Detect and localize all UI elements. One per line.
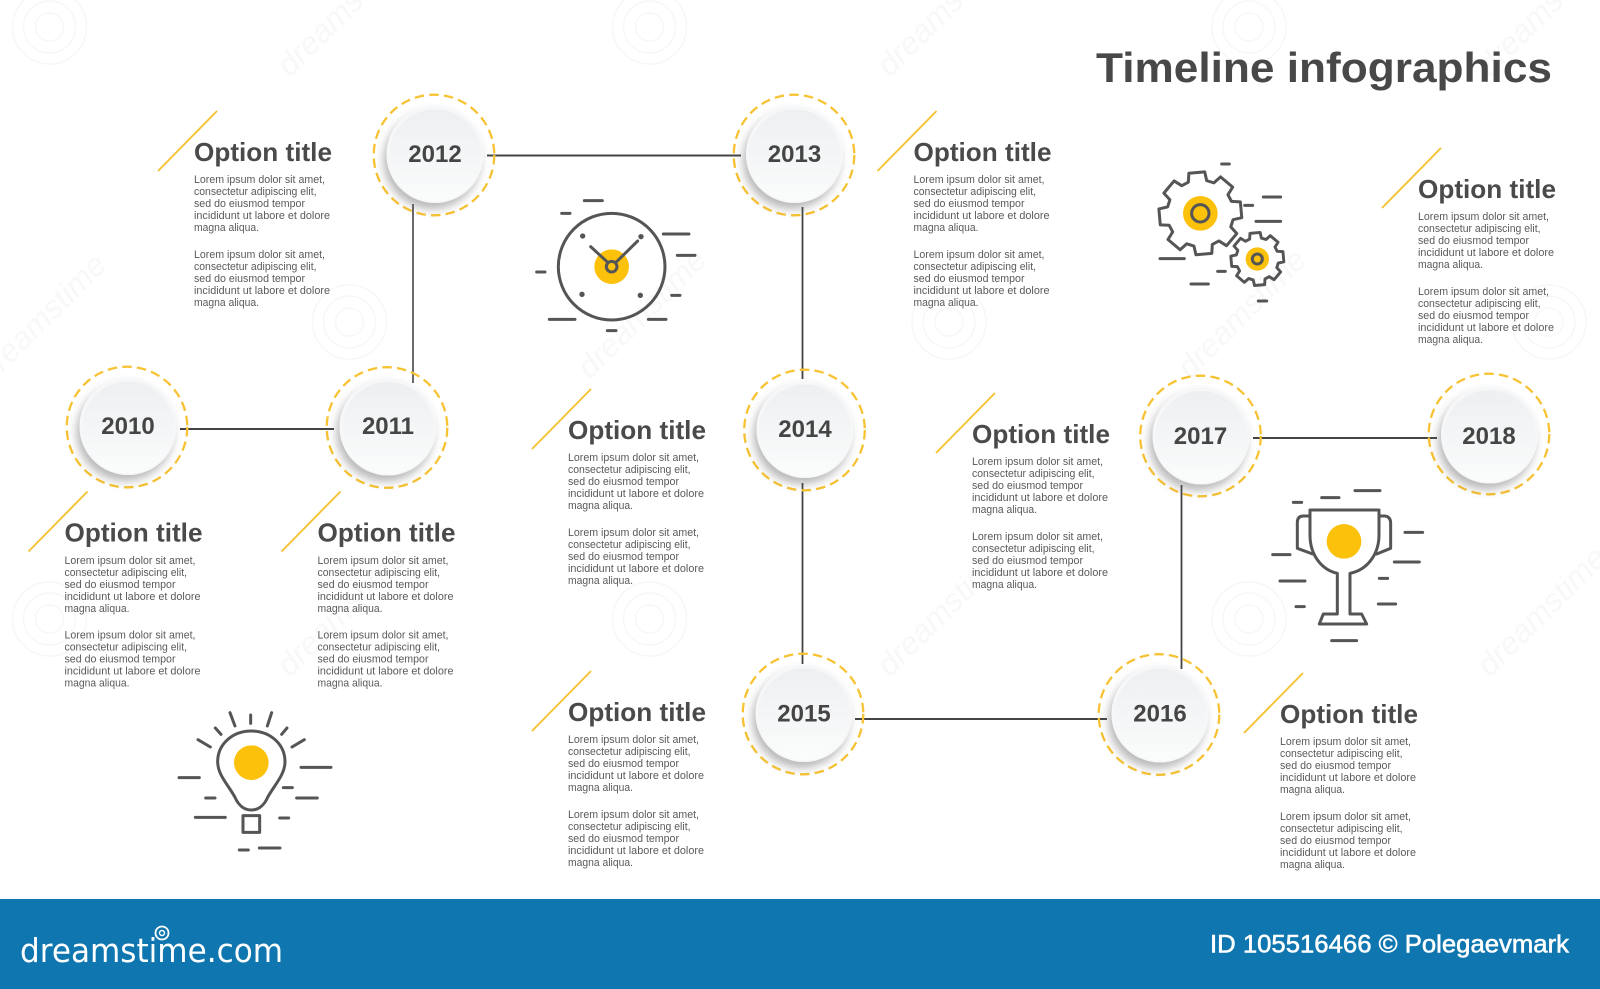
node: 2018: 2018 (1462, 423, 1516, 450)
node: 2014 (744, 370, 865, 490)
text block: 2014: Lorem ipsum dolor sit amet, (568, 527, 699, 539)
text block: 2011: consectetur adipiscing elit, (318, 567, 440, 579)
text block: 2011: Lorem ipsum dolor sit amet, (318, 630, 448, 642)
node: 2012 (374, 95, 494, 215)
text block: 2011: consectetur adipiscing elit, (318, 642, 440, 654)
text block: 2010: sed do eiusmod tempor (64, 579, 176, 591)
icon: light bulb (179, 713, 331, 850)
text block: 2018: Option title (1418, 174, 1556, 204)
text block: 2013: magna aliqua. (914, 222, 978, 234)
text block: 2012: magna aliqua. (194, 222, 259, 234)
node: 2017: 2017 (1174, 423, 1227, 450)
text block: 2017: Lorem ipsum dolor sit amet, (972, 456, 1103, 468)
text block: 2015: Option title (568, 697, 706, 727)
text block: 2014: consectetur adipiscing elit, (568, 539, 690, 551)
watermark pattern: dreamstime (269, 539, 413, 683)
node: 2012: 2012 (408, 141, 462, 168)
text block: 2017: Lorem ipsum dolor sit amet, (972, 531, 1103, 543)
watermark pattern: dreamstime (569, 241, 713, 385)
text block: 2017: magna aliqua. (972, 504, 1037, 516)
text block: 2014: Lorem ipsum dolor sit amet, (568, 452, 699, 464)
text block: 2017: Option title (972, 419, 1110, 449)
node: 2014: 2014 (778, 416, 832, 443)
text block: 2015: incididunt ut labore et dolore (568, 845, 704, 857)
text block: 2014 (532, 389, 706, 587)
icon: gears (1159, 164, 1284, 301)
text block: 2014: incididunt ut labore et dolore (568, 488, 704, 500)
node: 2015: 2015 (777, 700, 831, 728)
node: 2013 (734, 95, 854, 215)
text block: 2010: consectetur adipiscing elit, (64, 567, 187, 579)
text block: 2016: consectetur adipiscing elit, (1280, 823, 1402, 835)
text block: 2017: consectetur adipiscing elit, (972, 543, 1094, 555)
text block: 2013: Lorem ipsum dolor sit amet, (914, 249, 1044, 261)
text block: 2011: incididunt ut labore et dolore (318, 666, 454, 678)
text block: 2015: Lorem ipsum dolor sit amet, (568, 809, 699, 821)
text block: 2018: magna aliqua. (1418, 334, 1483, 346)
text block: 2010: Option title (64, 518, 202, 548)
text block: 2018: incididunt ut labore et dolore (1418, 322, 1554, 334)
image id and credit: ID 105516466 © Polegaevmark (1210, 930, 1570, 958)
text block: 2013 (878, 111, 1052, 309)
text block: 2018 (1382, 148, 1556, 346)
text block: 2013: magna aliqua. (914, 297, 978, 309)
text block: 2012: Lorem ipsum dolor sit amet, (194, 174, 325, 186)
text block: 2014: magna aliqua. (568, 500, 633, 512)
text block: 2011: magna aliqua. (318, 603, 382, 615)
text block: 2014: Option title (568, 415, 706, 445)
text block: 2014: sed do eiusmod tempor (568, 551, 679, 563)
text block: 2010: magna aliqua. (64, 678, 130, 690)
text block: 2015: incididunt ut labore et dolore (568, 770, 704, 782)
text block: 2014: consectetur adipiscing elit, (568, 464, 690, 476)
text block: 2015: magna aliqua. (568, 857, 633, 869)
text block: 2015 (532, 671, 706, 869)
text block: 2012: consectetur adipiscing elit, (194, 186, 316, 198)
timeline connectors (180, 156, 1437, 719)
text block: 2010: Lorem ipsum dolor sit amet, (64, 630, 196, 642)
text block: 2011: magna aliqua. (318, 678, 382, 690)
text block: 2012: sed do eiusmod tempor (194, 198, 305, 210)
text block: 2013: incididunt ut labore et dolore (914, 210, 1050, 222)
text block: 2010 (28, 492, 202, 690)
text block: 2012: incididunt ut labore et dolore (194, 285, 330, 297)
text block: 2017: magna aliqua. (972, 579, 1037, 591)
text block: 2015: consectetur adipiscing elit, (568, 746, 690, 758)
text block: 2018: Lorem ipsum dolor sit amet, (1418, 286, 1549, 298)
text block: 2011: incididunt ut labore et dolore (318, 591, 454, 603)
text block: 2016 (1244, 673, 1418, 871)
node: 2015 (743, 654, 863, 774)
node: 2011 (327, 367, 447, 488)
node: 2010 (67, 367, 187, 487)
node: 2011: 2011 (362, 413, 414, 440)
title: Timeline infographics (1096, 44, 1552, 91)
text block: 2010: sed do eiusmod tempor (64, 654, 176, 666)
node: 2010: 2010 (101, 413, 155, 440)
text block: 2017: incididunt ut labore et dolore (972, 492, 1108, 504)
text block: 2018: Lorem ipsum dolor sit amet, (1418, 211, 1549, 223)
text block: 2014: magna aliqua. (568, 575, 633, 587)
watermark pattern: dreamstime (1169, 241, 1313, 385)
text block: 2016: magna aliqua. (1280, 784, 1345, 796)
text block: 2014: incididunt ut labore et dolore (568, 563, 704, 575)
text block: 2017: sed do eiusmod tempor (972, 555, 1083, 567)
node: 2016 (1099, 654, 1219, 775)
text block: 2013: incididunt ut labore et dolore (914, 285, 1050, 297)
text block: 2014: sed do eiusmod tempor (568, 476, 679, 488)
text block: 2013: Lorem ipsum dolor sit amet, (914, 174, 1044, 186)
text block: 2016: sed do eiusmod tempor (1280, 760, 1391, 772)
text block: 2010: incididunt ut labore et dolore (64, 666, 200, 678)
text block: 2018: sed do eiusmod tempor (1418, 235, 1529, 247)
text block: 2012: consectetur adipiscing elit, (194, 261, 316, 273)
text block: 2017: consectetur adipiscing elit, (972, 468, 1094, 480)
text block: 2016: magna aliqua. (1280, 859, 1345, 871)
text block: 2010: Lorem ipsum dolor sit amet, (64, 555, 196, 567)
text block: 2016: consectetur adipiscing elit, (1280, 748, 1402, 760)
text block: 2010: magna aliqua. (64, 603, 130, 615)
text block: 2013: consectetur adipiscing elit, (914, 261, 1036, 273)
text block: 2018: consectetur adipiscing elit, (1418, 223, 1540, 235)
text block: 2010: consectetur adipiscing elit, (64, 642, 187, 654)
text block: 2011 (282, 492, 456, 690)
text block: 2015: sed do eiusmod tempor (568, 833, 679, 845)
node: 2013: 2013 (768, 141, 821, 168)
text block: 2017: sed do eiusmod tempor (972, 480, 1083, 492)
text block: 2016: Option title (1280, 699, 1418, 729)
text block: 2015: Lorem ipsum dolor sit amet, (568, 734, 699, 746)
node: 2018 (1429, 374, 1549, 494)
text block: 2016: Lorem ipsum dolor sit amet, (1280, 811, 1411, 823)
footer bar (0, 899, 1600, 989)
text block: 2017: incididunt ut labore et dolore (972, 567, 1108, 579)
text block: 2012: Lorem ipsum dolor sit amet, (194, 249, 325, 261)
text block: 2016: incididunt ut labore et dolore (1280, 847, 1416, 859)
text block: 2012 (158, 111, 332, 309)
icon: clock (537, 201, 695, 331)
icon: trophy (1273, 491, 1423, 641)
text block: 2018: incididunt ut labore et dolore (1418, 247, 1554, 259)
text block: 2010: incididunt ut labore et dolore (64, 591, 200, 603)
watermark pattern (0, 0, 1600, 683)
watermark pattern: dreamstime (869, 539, 1013, 683)
text block: 2015: consectetur adipiscing elit, (568, 821, 690, 833)
text block: 2018: magna aliqua. (1418, 259, 1483, 271)
text block: 2013: consectetur adipiscing elit, (914, 186, 1036, 198)
text block: 2011: sed do eiusmod tempor (318, 579, 429, 591)
text block: 2018: consectetur adipiscing elit, (1418, 298, 1540, 310)
text block: 2012: Option title (194, 137, 332, 167)
text block: 2018: sed do eiusmod tempor (1418, 310, 1529, 322)
text block: 2016: sed do eiusmod tempor (1280, 835, 1391, 847)
node: 2017 (1140, 376, 1261, 496)
text block: 2013: Option title (914, 137, 1052, 167)
text block: 2011: sed do eiusmod tempor (318, 654, 429, 666)
dreamstime logo: dreamstime.com (20, 931, 283, 970)
text block: 2015: magna aliqua. (568, 782, 633, 794)
text block: 2016: Lorem ipsum dolor sit amet, (1280, 736, 1411, 748)
text block: 2011: Lorem ipsum dolor sit amet, (318, 555, 448, 567)
text block: 2016: incididunt ut labore et dolore (1280, 772, 1416, 784)
text block: 2012: sed do eiusmod tempor (194, 273, 305, 285)
text block: 2017 (936, 393, 1110, 591)
text block: 2015: sed do eiusmod tempor (568, 758, 679, 770)
text block: 2012: magna aliqua. (194, 297, 259, 309)
text block: 2012: incididunt ut labore et dolore (194, 210, 330, 222)
node: 2016: 2016 (1133, 700, 1187, 728)
text block: 2013: sed do eiusmod tempor (914, 273, 1025, 285)
text block: 2013: sed do eiusmod tempor (914, 198, 1025, 210)
text block: 2011: Option title (318, 518, 456, 548)
